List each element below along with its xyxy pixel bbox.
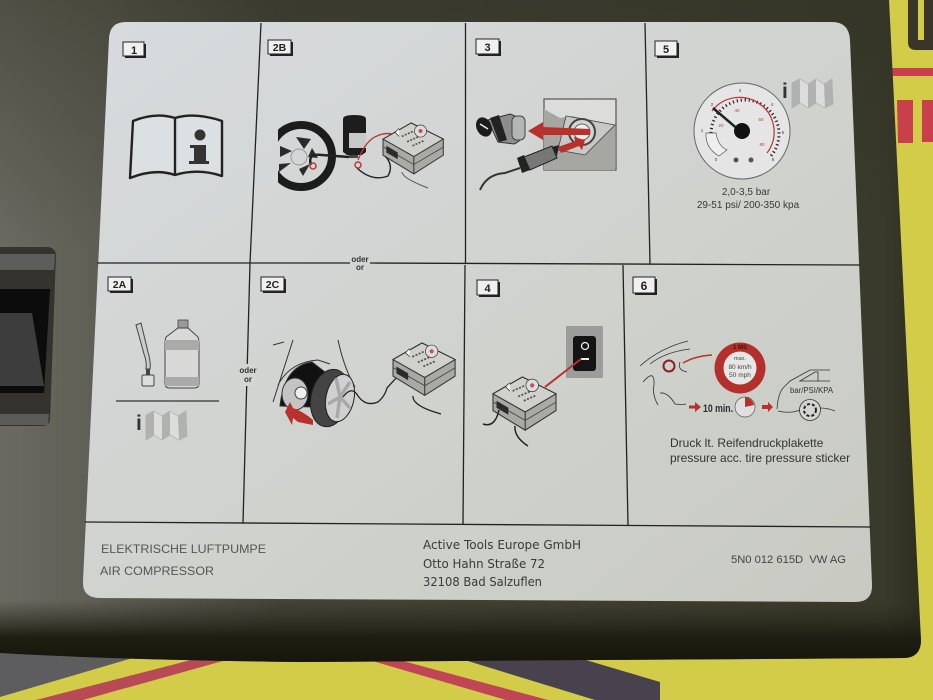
gauge numbers: 1: [701, 128, 704, 133]
icon: sealant bottle: [343, 115, 366, 158]
arrow: red pointer: [683, 355, 712, 363]
step badge 2A: [108, 277, 133, 293]
speed limit disc: max.: [734, 356, 746, 362]
footer: manufacturer address: Active Tools Europe GmbH: [423, 538, 581, 552]
icon: ten minute clock: [735, 397, 755, 417]
step badge 2C: [261, 277, 286, 293]
icon: information leaflet: [136, 411, 187, 440]
hose: [343, 377, 441, 414]
footer: product name: ELEKTRISCHE LUFTPUMPE: [101, 542, 266, 556]
icon: compressor: [383, 123, 443, 174]
step badge 5: 5: [663, 44, 669, 56]
step badge 2B: [268, 40, 293, 56]
icon: wheel: [270, 125, 332, 187]
panel 2B: sealant bottle, wheel and compressor: [268, 40, 443, 188]
step badge 6: [633, 277, 657, 295]
footer: product name: AIR COMPRESSOR: [100, 564, 214, 578]
speed limit disc: 50 mph: [729, 372, 751, 379]
icon: wheel hub: [282, 378, 308, 410]
pressure caption: pressure acc. tire pressure sticker: [670, 451, 850, 465]
arrow: [689, 402, 701, 412]
step badge 3: 3: [484, 42, 491, 54]
pressure caption: Druck lt. Reifendruckplakette: [670, 436, 824, 450]
icon: compressor: [393, 343, 455, 395]
icon: filler hose: [136, 323, 154, 386]
icon: sealant bottle: [165, 320, 199, 388]
gauge numbers: 5: [782, 130, 785, 135]
speed limit disc: 80 km/h: [728, 364, 752, 371]
gauge numbers: 4: [771, 102, 774, 107]
speed limit disc: 1 MS: [733, 345, 747, 351]
oder / or separator, left: [239, 364, 257, 386]
oder / or separator, top: oder: [351, 255, 369, 264]
footer: manufacturer address: 32108 Bad Salzuflen: [423, 575, 542, 589]
oder / or separator, left: or: [244, 375, 252, 384]
pressure range text: 29-51 psi/ 200-350 kpa: [697, 200, 800, 211]
divider: [116, 400, 219, 402]
step badge 6: 6: [641, 279, 648, 293]
icon: car rear with pressure label: [777, 370, 835, 420]
footer: manufacturer address: [423, 538, 581, 589]
arrow: insert plug: [558, 137, 585, 153]
gauge numbers: 20: [718, 123, 724, 128]
panel 5: pressure gauge: [655, 41, 833, 211]
icon: tyre: [305, 366, 359, 430]
oder / or separator, top: or: [356, 263, 364, 272]
arrow: remove lighter: [528, 122, 590, 140]
step badge 1: 1: [131, 45, 137, 57]
pressure range text: [697, 187, 800, 211]
gauge numbers: 6: [772, 157, 775, 162]
footer: manufacturer address: Otto Hahn Straße 72: [423, 557, 545, 571]
gauge numbers: 60: [758, 117, 764, 122]
panel grid lines: [85, 23, 871, 527]
gauge numbers: 3: [739, 88, 742, 93]
icon: cigarette lighter: [473, 114, 525, 144]
pointer line: [545, 359, 581, 387]
panel 2A: sealant bottle and nozzle: [108, 277, 219, 440]
10 minutes label: 10 min.: [703, 403, 733, 415]
step badge 2C: 2C: [266, 279, 280, 291]
gauge numbers: 40: [734, 108, 740, 113]
hoses: [310, 134, 428, 188]
step badge 3: [476, 39, 501, 56]
instruction sticker: [83, 22, 872, 602]
speed limit disc: [714, 342, 766, 394]
gauge numbers: 0: [715, 157, 718, 162]
step badge 2B: 2B: [273, 42, 287, 54]
carry handle recess on case: [0, 247, 56, 426]
gauge numbers: 2: [711, 102, 714, 107]
panel 3: power plug and socket: [473, 39, 616, 190]
icon: car wheel arch: [273, 340, 355, 407]
step badge 4: 4: [484, 283, 491, 295]
panel 1: read manual: [123, 42, 222, 178]
oder / or separator, top: [351, 255, 369, 272]
panel 2C: compressor hooked to mounted wheel: [261, 277, 455, 430]
icon: information leaflet: [782, 79, 833, 108]
panel 6: driving limits and pressure check: [633, 277, 850, 465]
step badge 2A: 2A: [113, 279, 127, 291]
pressure range text: 2,0-3,5 bar: [722, 187, 771, 198]
icon: 12V plug and cable: [480, 145, 559, 190]
step badge 5: [655, 41, 679, 58]
icon: open book with information i: [130, 116, 222, 178]
gauge numbers: 80: [759, 142, 765, 147]
icon: wheel arch with valve marker: [640, 341, 690, 405]
gauge numbers: [701, 88, 785, 162]
icon: rocker switch: [566, 326, 603, 378]
cables: [483, 410, 528, 446]
icon: compressor: [493, 377, 556, 430]
car pressure label text: bar/PSI/KPA: [790, 386, 834, 395]
panel 4: power switch: [477, 280, 603, 446]
footer: part number: 5N0 012 615D VW AG: [731, 554, 846, 566]
gauge dial: [694, 83, 790, 179]
footer: product name: [100, 542, 266, 578]
arrow: mount wheel: [285, 402, 313, 425]
oder / or separator, left: oder: [239, 366, 257, 375]
pressure caption: [670, 436, 850, 465]
arrow: [762, 402, 773, 412]
step badge 4: [477, 280, 500, 297]
socket inset: [544, 99, 616, 170]
